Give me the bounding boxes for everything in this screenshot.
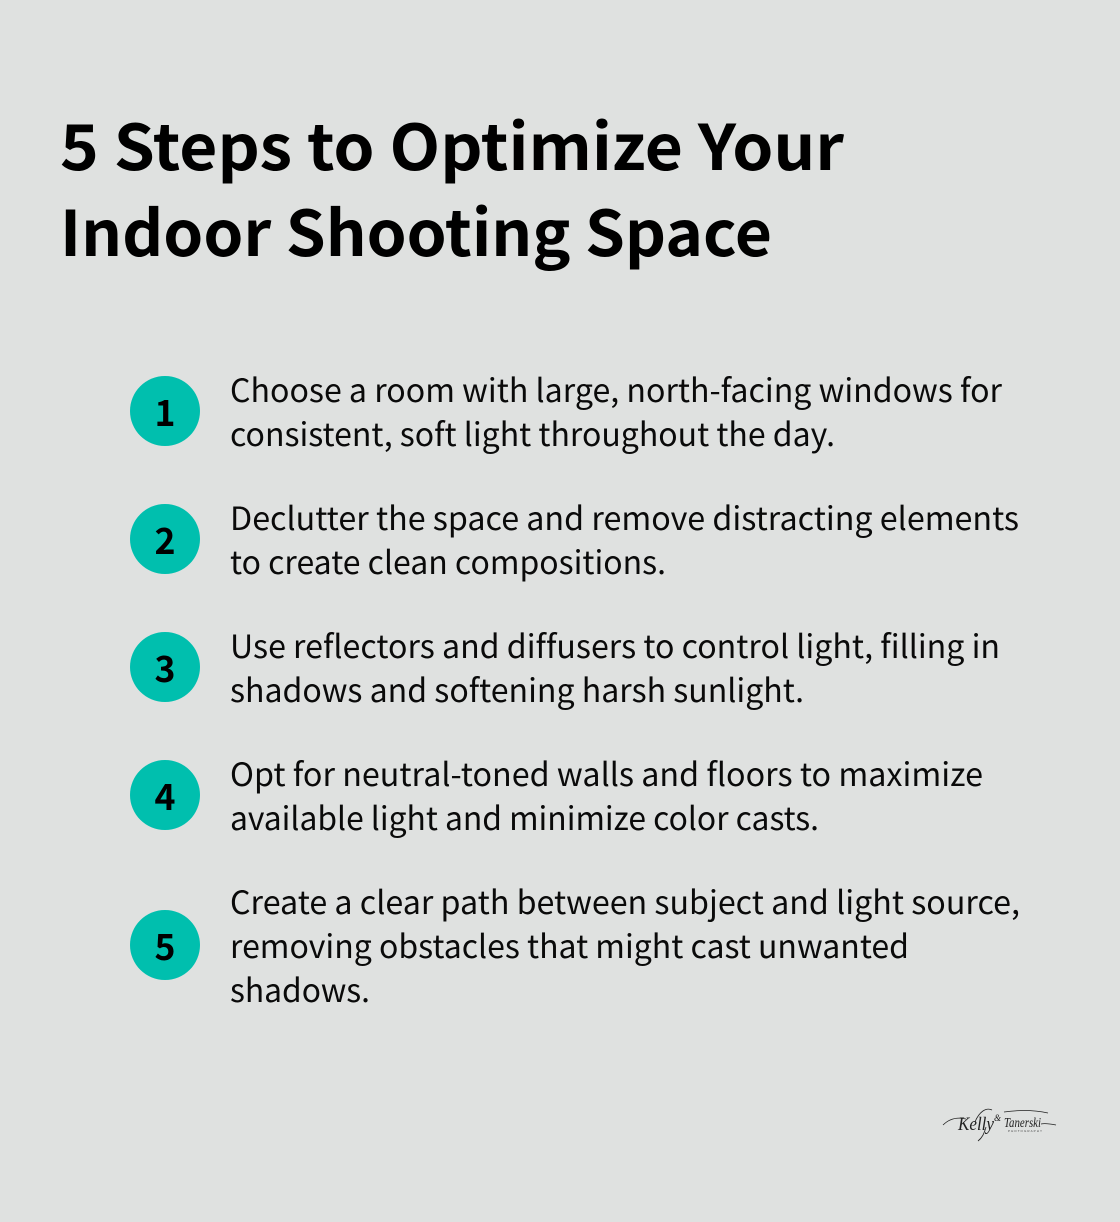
number badge 3: [130, 632, 200, 702]
number badge 1: [130, 376, 200, 446]
title: [60, 98, 845, 275]
step 1 text: [230, 366, 1003, 456]
step 3 text: [230, 622, 1000, 712]
step 4: [130, 750, 983, 840]
logo: signature: PHOTOGRAPHY: [1008, 1129, 1042, 1133]
number badge 4: 4: [154, 769, 176, 821]
step 2: [130, 494, 1019, 584]
step 2 text: to create clean compositions.: [230, 538, 666, 584]
number badge 5: 5: [154, 919, 176, 971]
number badge 3: 3: [154, 641, 176, 693]
logo: signature: [943, 1109, 1056, 1141]
number badge 4: [130, 760, 200, 830]
number badge 1: 1: [154, 385, 176, 437]
step 4 text: available light and minimize color casts.: [230, 794, 819, 840]
title: Indoor Shooting Space: [60, 184, 772, 275]
number badge 2: [130, 504, 200, 574]
step 2 text: [230, 494, 1019, 584]
logo: signature: Kelly: [957, 1114, 994, 1135]
step 3: [130, 622, 1000, 712]
logo: signature: Tanerski: [1004, 1116, 1041, 1131]
step 5 text: shadows.: [230, 966, 370, 1012]
step 4 text: [230, 750, 983, 840]
title: 5 Steps to Optimize Your: [60, 98, 845, 189]
step 3 text: shadows and softening harsh sunlight.: [230, 666, 804, 712]
step 5 text: removing obstacles that might cast unwanted: [230, 922, 909, 968]
logo: signature: &: [994, 1113, 1001, 1123]
step 1 text: Choose a room with large, north-facing windows for: [230, 366, 1003, 412]
step 5 text: Create a clear path between subject and light source,: [230, 878, 1020, 924]
step 2 text: Declutter the space and remove distracting elements: [230, 494, 1019, 540]
number badge 5: [130, 910, 200, 980]
step 5 text: [230, 878, 1020, 1012]
step 4 text: Opt for neutral-toned walls and floors to maximize: [230, 750, 983, 796]
step 1 text: consistent, soft light throughout the day.: [230, 410, 835, 456]
step 5: [130, 878, 1020, 1012]
number badge 2: 2: [154, 513, 176, 565]
step 3 text: Use reflectors and diffusers to control light, filling in: [230, 622, 1000, 668]
step 1: [130, 366, 1003, 456]
